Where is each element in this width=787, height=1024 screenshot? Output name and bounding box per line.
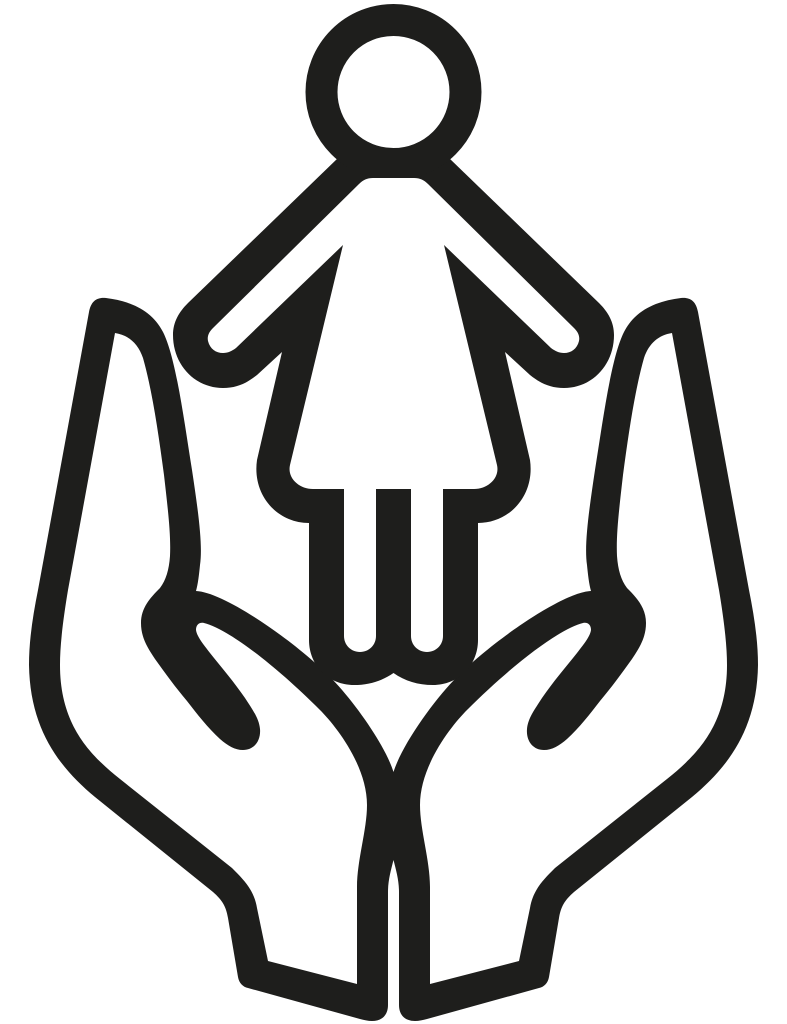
body outline [173,158,614,685]
right hand [394,298,758,1021]
person figure [173,20,614,685]
left hand [29,298,394,1021]
dress and arms inner [208,178,579,652]
head [322,20,466,164]
